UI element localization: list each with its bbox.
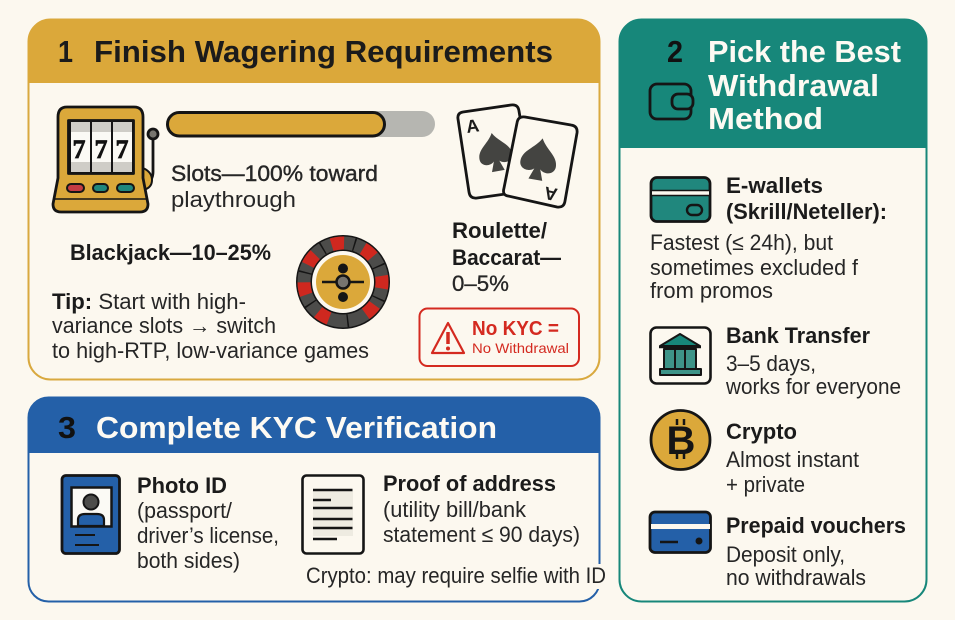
heading: step 1: 1	[58, 34, 73, 69]
text: slots contribution: playthrough	[171, 187, 296, 212]
item: photo ID: (passport/	[137, 498, 233, 523]
icon: wallet	[650, 84, 693, 119]
heading: step 3: 3	[58, 410, 76, 445]
card corner letters	[465, 115, 559, 205]
text: blackjack contribution: Blackjack—10–25%	[70, 240, 271, 265]
panel: finish wagering requirements	[28, 19, 600, 380]
item: proof of address: statement ≤ 90 days)	[383, 522, 580, 547]
item: crypto: Crypto	[726, 419, 797, 444]
icon: ID card	[62, 476, 120, 554]
item: e-wallets: sometimes excluded f	[650, 255, 859, 280]
panel 1 header band	[28, 19, 600, 83]
panel: pick the best withdrawal method	[619, 19, 927, 602]
callout: no KYC warning: No KYC =	[472, 318, 559, 340]
icon: warning triangle	[432, 323, 464, 353]
item: e-wallets: E-wallets	[726, 173, 823, 198]
item: prepaid vouchers	[650, 512, 906, 590]
slot reel digits: 7	[94, 135, 108, 164]
callout: no KYC warning: No Withdrawal	[472, 340, 569, 356]
heading: step 2	[667, 34, 901, 136]
panel: complete KYC verification	[28, 397, 608, 602]
item: photo ID: driver’s license,	[137, 523, 279, 548]
item: photo ID: both sides)	[137, 548, 240, 573]
panel 2 header band	[619, 19, 927, 148]
item: photo ID	[62, 473, 279, 573]
item: photo ID: Photo ID	[137, 473, 227, 498]
item: e-wallets: (Skrill/Neteller):	[726, 199, 887, 224]
icon: e-wallet card	[651, 178, 710, 222]
text: tip	[52, 289, 369, 363]
text: crypto selfie note: Crypto: may require selfie with ID	[306, 563, 606, 588]
text: roulette and baccarat contribution: 0–5%	[452, 271, 509, 296]
icon: bank building	[650, 328, 710, 384]
item: crypto: Almost instant	[726, 447, 859, 472]
item: bank transfer	[650, 323, 901, 399]
text: roulette and baccarat contribution: Baccarat—	[452, 245, 561, 270]
item: bank transfer: 3–5 days,	[726, 351, 816, 376]
card corner letters: A	[465, 115, 480, 137]
icon: roulette wheel	[288, 227, 398, 337]
icon: voucher card	[650, 512, 710, 552]
callout: no KYC warning	[420, 308, 579, 366]
patch behind crypto note	[590, 564, 608, 589]
heading: step 2: Method	[708, 101, 823, 136]
item: e-wallets	[650, 173, 887, 303]
heading: step 2: 2	[667, 34, 683, 69]
panel 3 header band	[28, 397, 600, 453]
icon: document	[302, 476, 364, 554]
slot reel digits	[72, 135, 128, 164]
icon: bitcoin coin	[651, 410, 710, 470]
item: proof of address: Proof of address	[383, 471, 556, 496]
heading: step 2: Pick the Best	[708, 34, 901, 69]
text: tip: Tip: Start with high-	[52, 289, 246, 314]
slot reel digits: 7	[72, 135, 86, 164]
text: slots contribution: Slots—100% toward	[171, 161, 378, 186]
text: tip: to high-RTP, low-variance games	[52, 338, 369, 363]
text: roulette and baccarat contribution: Roulette/	[452, 218, 547, 243]
heading: step 1: Finish Wagering Requirements	[94, 34, 553, 69]
item: prepaid vouchers: Prepaid vouchers	[726, 513, 906, 538]
item: bank transfer: works for everyone	[725, 374, 901, 399]
text: roulette and baccarat contribution	[452, 218, 561, 296]
item: e-wallets: from promos	[650, 278, 773, 303]
icon: playing cards	[458, 105, 577, 207]
text: slots contribution	[171, 161, 378, 212]
item: crypto	[651, 410, 859, 497]
card corner letters: A	[542, 183, 559, 205]
item: prepaid vouchers: no withdrawals	[726, 565, 866, 590]
icon: bitcoin coin: B	[667, 419, 695, 463]
slot reel digits: 7	[116, 135, 128, 164]
item: e-wallets: Fastest (≤ 24h), but	[650, 230, 833, 255]
item: crypto: + private	[726, 472, 805, 497]
heading: step 3: Complete KYC Verification	[96, 410, 497, 445]
heading: step 2: Withdrawal	[708, 68, 879, 103]
icon: slot machine	[53, 107, 158, 212]
item: prepaid vouchers: Deposit only,	[726, 542, 845, 567]
item: bank transfer: Bank Transfer	[726, 323, 870, 348]
text: tip: variance slots → switch	[52, 313, 276, 338]
item: proof of address	[302, 471, 580, 554]
progress bar: slots 100%	[168, 111, 435, 137]
item: proof of address: (utility bill/bank	[383, 497, 527, 522]
